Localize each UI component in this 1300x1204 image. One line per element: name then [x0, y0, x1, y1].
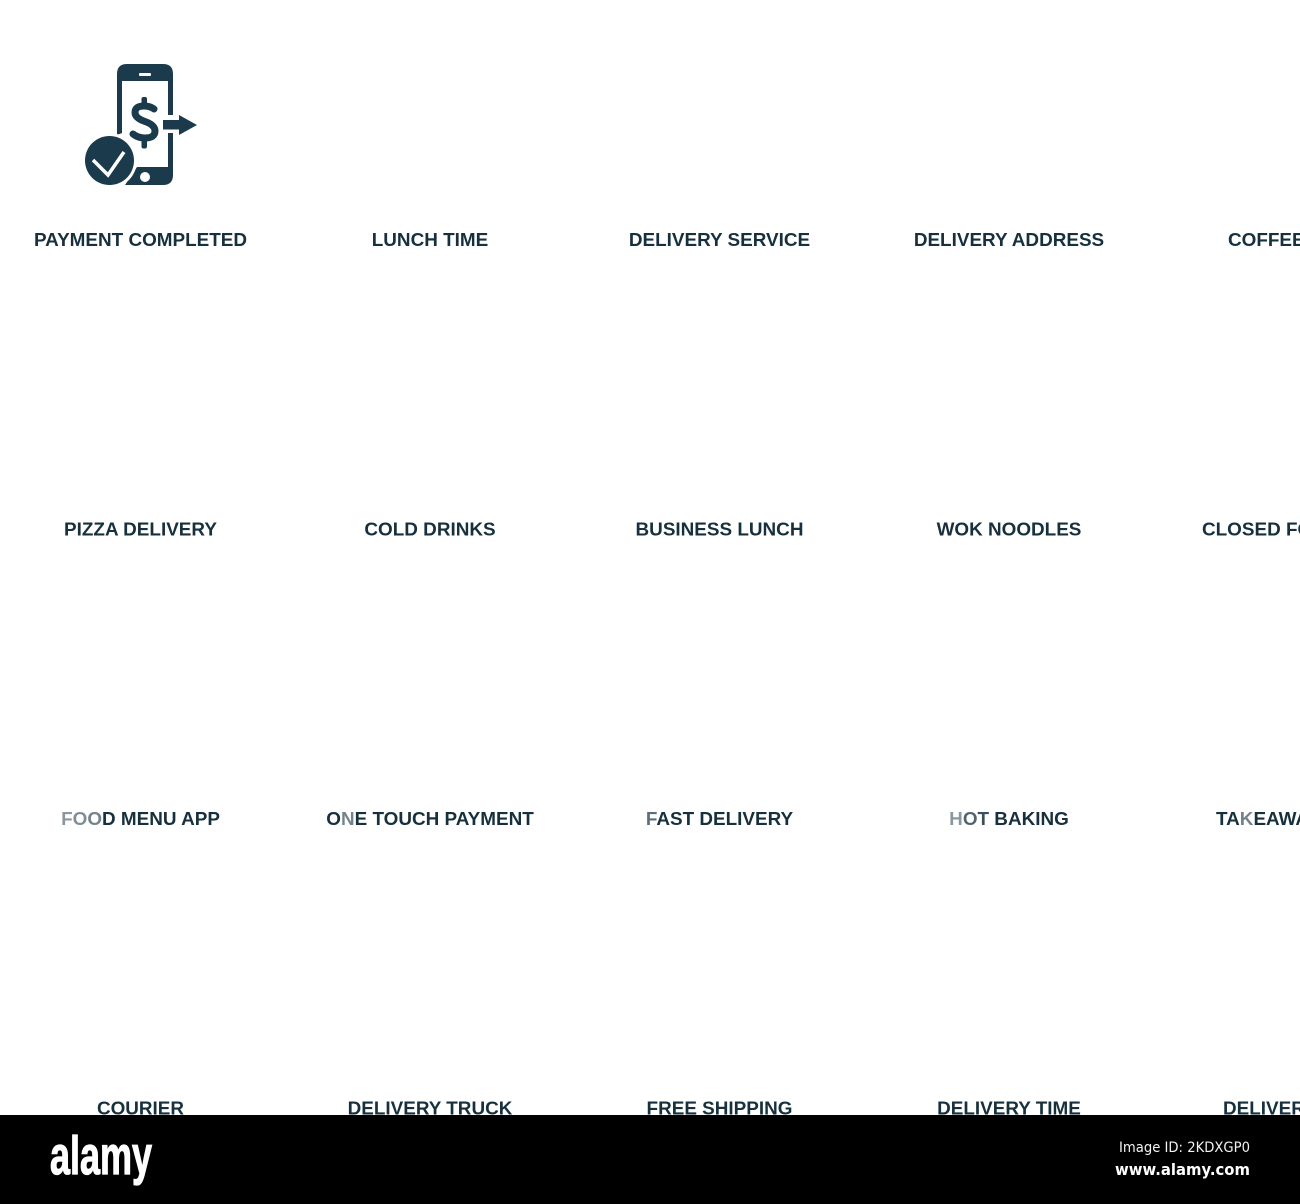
labels row 2: PIZZA DELIVERY [64, 520, 217, 540]
labels row 3 [61, 809, 1300, 830]
labels row 2: COLD DRINKS [364, 520, 496, 540]
labels row 4: DELIVERY TIME [937, 1098, 1081, 1120]
labels row 1 [34, 230, 1300, 251]
image id: Image ID: 2KDXGP0 [1119, 1140, 1250, 1156]
labels row 3: FOOD MENU APP [61, 809, 220, 830]
labels row 3: ONE TOUCH PAYMENT [326, 809, 534, 830]
labels row 2 [64, 520, 1300, 540]
labels row 4 [97, 1098, 1300, 1120]
labels row 1: DELIVERY ADDRESS [914, 230, 1104, 251]
website: www.alamy.com [1115, 1160, 1250, 1179]
labels row 1: DELIVERY SERVICE [629, 230, 810, 251]
icon: payment completed phone [82, 64, 197, 188]
watermark bar [0, 1115, 1300, 1204]
labels row 4: DELIVERY TRUCK [348, 1098, 513, 1120]
labels row 3: HOT BAKING [949, 809, 1069, 830]
labels row 4: FREE SHIPPING [647, 1098, 792, 1120]
logo: alamy: alamy [50, 1126, 152, 1186]
labels row 1: LUNCH TIME [372, 230, 488, 251]
labels row 4: COURIER [97, 1098, 184, 1120]
labels row 1: PAYMENT COMPLETED [34, 230, 247, 251]
labels row 3: FAST DELIVERY [646, 809, 794, 830]
labels row 2: BUSINESS LUNCH [636, 520, 803, 540]
labels row 2: WOK NOODLES [937, 520, 1081, 540]
